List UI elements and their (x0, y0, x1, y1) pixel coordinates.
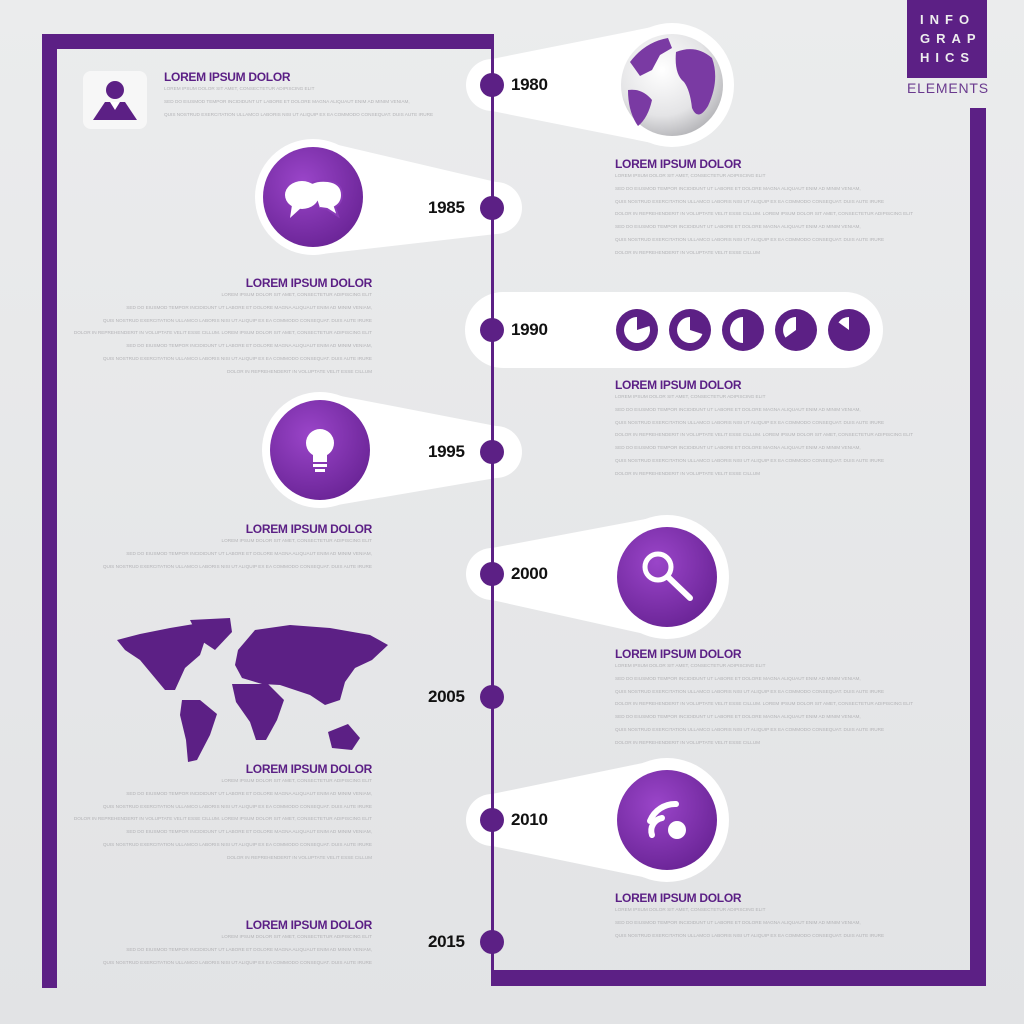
text: 2015 (103, 918, 372, 965)
text: 1980 (615, 157, 913, 255)
text: 1990: LOREM IPSUM DOLOR (615, 378, 741, 392)
text: 1985: SED DO EIUSMOD TEMPOR INCIDIDUNT UT LABORE ET DOLORE MAGNA ALIQUAUT ENIM AD MINIM VENIAM, (126, 305, 372, 310)
text: 2010 (615, 891, 884, 938)
text: 1985: SED DO EIUSMOD TEMPOR INCIDIDUNT UT LABORE ET DOLORE MAGNA ALIQUAUT ENIM AD MINIM VENIAM, (126, 343, 372, 348)
text: 2015: SED DO EIUSMOD TEMPOR INCIDIDUNT UT LABORE ET DOLORE MAGNA ALIQUAUT ENIM AD MINIM VENIAM, (126, 947, 372, 952)
timeline line (491, 34, 494, 986)
icon: pies (616, 309, 870, 351)
text: 1985: QUIS NOSTRUD EXERCITATION ULLAMCO LABORIS NISI UT ALIQUIP EX EA COMMODO CONSEQUAT. DUIS AUTE IRURE (103, 318, 372, 323)
text: 1990: SED DO EIUSMOD TEMPOR INCIDIDUNT UT LABORE ET DOLORE MAGNA ALIQUAUT ENIM AD MINIM VENIAM, (615, 407, 861, 412)
icon: person tile (83, 71, 147, 129)
text: 1995 (428, 442, 465, 461)
text: 2000 (511, 564, 548, 583)
subtitle: ELEMENTS (907, 80, 989, 96)
text: 1990: SED DO EIUSMOD TEMPOR INCIDIDUNT UT LABORE ET DOLORE MAGNA ALIQUAUT ENIM AD MINIM VENIAM, (615, 445, 861, 450)
text: 2015 (428, 932, 465, 951)
years: 1980 (511, 75, 548, 94)
text: 2000 (615, 647, 913, 745)
text: 2005: SED DO EIUSMOD TEMPOR INCIDIDUNT UT LABORE ET DOLORE MAGNA ALIQUAUT ENIM AD MINIM VENIAM, (126, 791, 372, 796)
text: 1995: LOREM IPSUM DOLOR SIT AMET, CONSECTETUR ADIPISCING ELIT (222, 538, 372, 543)
text: 1980: SED DO EIUSMOD TEMPOR INCIDIDUNT UT LABORE ET DOLORE MAGNA ALIQUAUT ENIM AD MINIM VENIAM, (615, 186, 861, 191)
text: 1985 (74, 276, 372, 374)
text: 1985: QUIS NOSTRUD EXERCITATION ULLAMCO LABORIS NISI UT ALIQUIP EX EA COMMODO CONSEQUAT. DUIS AUTE IRURE (103, 356, 372, 361)
text: 1990: LOREM IPSUM DOLOR SIT AMET, CONSECTETUR ADIPISCING ELIT (615, 394, 765, 399)
text: 1985 (428, 198, 465, 217)
text: 1995: LOREM IPSUM DOLOR (246, 522, 372, 536)
text: 1985: DOLOR IN REPREHENDERIT IN VOLUPTATE VELIT ESSE CILLUM. LOREM IPSUM DOLOR SIT AMET, CONSECTETUR ADIPISCING ELIT (74, 330, 372, 335)
text: 2010 (511, 810, 548, 829)
text: 2000: LOREM IPSUM DOLOR (615, 647, 741, 661)
icon: bulb disc (270, 400, 370, 500)
white bubble 2010 (466, 758, 729, 882)
title box (907, 0, 987, 78)
world map (117, 618, 388, 762)
white bubble 2000 (466, 515, 729, 639)
text: 1995: QUIS NOSTRUD EXERCITATION ULLAMCO LABORIS NISI UT ALIQUIP EX EA COMMODO CONSEQUAT. DUIS AUTE IRURE (103, 564, 372, 569)
text: 1980: LOREM IPSUM DOLOR (615, 157, 741, 171)
text: 1980: DOLOR IN REPREHENDERIT IN VOLUPTATE VELIT ESSE CILLUM. LOREM IPSUM DOLOR SIT AMET, CONSECTETUR ADIPISCING ELIT (615, 211, 913, 216)
icon: chat disc (263, 147, 363, 247)
text: 1985: LOREM IPSUM DOLOR (246, 276, 372, 290)
text: 2005: QUIS NOSTRUD EXERCITATION ULLAMCO LABORIS NISI UT ALIQUIP EX EA COMMODO CONSEQUAT. DUIS AUTE IRURE (103, 804, 372, 809)
text: 1990: QUIS NOSTRUD EXERCITATION ULLAMCO LABORIS NISI UT ALIQUIP EX EA COMMODO CONSEQUAT. DUIS AUTE IRURE (615, 420, 884, 425)
title box: GRAP (920, 31, 982, 46)
white bubble 1990 (465, 292, 883, 368)
text: top-left: QUIS NOSTRUD EXERCITATION ULLAMCO LABORIS NISI UT ALIQUIP EX EA COMMODO CONSEQUAT. DUIS AUTE IRURE (164, 112, 433, 117)
text: 2005 (428, 687, 465, 706)
text: 2005: QUIS NOSTRUD EXERCITATION ULLAMCO LABORIS NISI UT ALIQUIP EX EA COMMODO CONSEQUAT. DUIS AUTE IRURE (103, 842, 372, 847)
text: 2000: DOLOR IN REPREHENDERIT IN VOLUPTATE VELIT ESSE CILLUM (615, 740, 760, 745)
text: 2005: DOLOR IN REPREHENDERIT IN VOLUPTATE VELIT ESSE CILLUM (227, 855, 372, 860)
text: 2010: QUIS NOSTRUD EXERCITATION ULLAMCO LABORIS NISI UT ALIQUIP EX EA COMMODO CONSEQUAT. DUIS AUTE IRURE (615, 933, 884, 938)
text: 1995: SED DO EIUSMOD TEMPOR INCIDIDUNT UT LABORE ET DOLORE MAGNA ALIQUAUT ENIM AD MINIM VENIAM, (126, 551, 372, 556)
text: top-left (164, 70, 433, 117)
text: 2000: SED DO EIUSMOD TEMPOR INCIDIDUNT UT LABORE ET DOLORE MAGNA ALIQUAUT ENIM AD MINIM VENIAM, (615, 676, 861, 681)
text: 2010: LOREM IPSUM DOLOR (615, 891, 741, 905)
title box: INFO (920, 12, 975, 27)
text: 1980: QUIS NOSTRUD EXERCITATION ULLAMCO LABORIS NISI UT ALIQUIP EX EA COMMODO CONSEQUAT. DUIS AUTE IRURE (615, 199, 884, 204)
text: 1995 (103, 522, 372, 569)
text: 1990: DOLOR IN REPREHENDERIT IN VOLUPTATE VELIT ESSE CILLUM (615, 471, 760, 476)
text: top-left: LOREM IPSUM DOLOR SIT AMET, CONSECTETUR ADIPISCING ELIT (164, 86, 314, 91)
text: 1980: QUIS NOSTRUD EXERCITATION ULLAMCO LABORIS NISI UT ALIQUIP EX EA COMMODO CONSEQUAT. DUIS AUTE IRURE (615, 237, 884, 242)
text: 1985: DOLOR IN REPREHENDERIT IN VOLUPTATE VELIT ESSE CILLUM (227, 369, 372, 374)
white bubble 1995 (262, 392, 522, 508)
icon: magnifier disc (617, 527, 717, 627)
text: 2005 (74, 762, 372, 860)
text: 1990: DOLOR IN REPREHENDERIT IN VOLUPTATE VELIT ESSE CILLUM. LOREM IPSUM DOLOR SIT AMET, CONSECTETUR ADIPISCING ELIT (615, 432, 913, 437)
text: 2000: QUIS NOSTRUD EXERCITATION ULLAMCO LABORIS NISI UT ALIQUIP EX EA COMMODO CONSEQUAT. DUIS AUTE IRURE (615, 727, 884, 732)
text: 2010: LOREM IPSUM DOLOR SIT AMET, CONSECTETUR ADIPISCING ELIT (615, 907, 765, 912)
white bubble 1985 (255, 139, 522, 255)
timeline dots (480, 73, 504, 954)
text: 2015: LOREM IPSUM DOLOR (246, 918, 372, 932)
text: top-left: LOREM IPSUM DOLOR (164, 70, 290, 84)
white bubble 1980 (466, 23, 734, 147)
text: 2000: LOREM IPSUM DOLOR SIT AMET, CONSECTETUR ADIPISCING ELIT (615, 663, 765, 668)
text: 1980: SED DO EIUSMOD TEMPOR INCIDIDUNT UT LABORE ET DOLORE MAGNA ALIQUAUT ENIM AD MINIM VENIAM, (615, 224, 861, 229)
text: 2000: SED DO EIUSMOD TEMPOR INCIDIDUNT UT LABORE ET DOLORE MAGNA ALIQUAUT ENIM AD MINIM VENIAM, (615, 714, 861, 719)
icon: globe (621, 34, 723, 136)
text: 1990 (511, 320, 548, 339)
text: 2000: DOLOR IN REPREHENDERIT IN VOLUPTATE VELIT ESSE CILLUM. LOREM IPSUM DOLOR SIT AMET, CONSECTETUR ADIPISCING ELIT (615, 701, 913, 706)
text: 1980: LOREM IPSUM DOLOR SIT AMET, CONSECTETUR ADIPISCING ELIT (615, 173, 765, 178)
text: 2005: DOLOR IN REPREHENDERIT IN VOLUPTATE VELIT ESSE CILLUM. LOREM IPSUM DOLOR SIT AMET, CONSECTETUR ADIPISCING ELIT (74, 816, 372, 821)
text: 2005: LOREM IPSUM DOLOR SIT AMET, CONSECTETUR ADIPISCING ELIT (222, 778, 372, 783)
text: 2005: LOREM IPSUM DOLOR (246, 762, 372, 776)
text: top-left: SED DO EIUSMOD TEMPOR INCIDIDUNT UT LABORE ET DOLORE MAGNA ALIQUAUT ENIM AD MINIM VENIAM, (164, 99, 410, 104)
text: 1990: QUIS NOSTRUD EXERCITATION ULLAMCO LABORIS NISI UT ALIQUIP EX EA COMMODO CONSEQUAT. DUIS AUTE IRURE (615, 458, 884, 463)
text: 1990 (615, 378, 913, 476)
text: 2015: QUIS NOSTRUD EXERCITATION ULLAMCO LABORIS NISI UT ALIQUIP EX EA COMMODO CONSEQUAT. DUIS AUTE IRURE (103, 960, 372, 965)
text: 2005: SED DO EIUSMOD TEMPOR INCIDIDUNT UT LABORE ET DOLORE MAGNA ALIQUAUT ENIM AD MINIM VENIAM, (126, 829, 372, 834)
icon: wifi disc (617, 770, 717, 870)
title box: HICS (920, 50, 975, 65)
text: 2010: SED DO EIUSMOD TEMPOR INCIDIDUNT UT LABORE ET DOLORE MAGNA ALIQUAUT ENIM AD MINIM VENIAM, (615, 920, 861, 925)
text: 1980: DOLOR IN REPREHENDERIT IN VOLUPTATE VELIT ESSE CILLUM (615, 250, 760, 255)
text: 2015: LOREM IPSUM DOLOR SIT AMET, CONSECTETUR ADIPISCING ELIT (222, 934, 372, 939)
text: 2000: QUIS NOSTRUD EXERCITATION ULLAMCO LABORIS NISI UT ALIQUIP EX EA COMMODO CONSEQUAT. DUIS AUTE IRURE (615, 689, 884, 694)
text: 1985: LOREM IPSUM DOLOR SIT AMET, CONSECTETUR ADIPISCING ELIT (222, 292, 372, 297)
